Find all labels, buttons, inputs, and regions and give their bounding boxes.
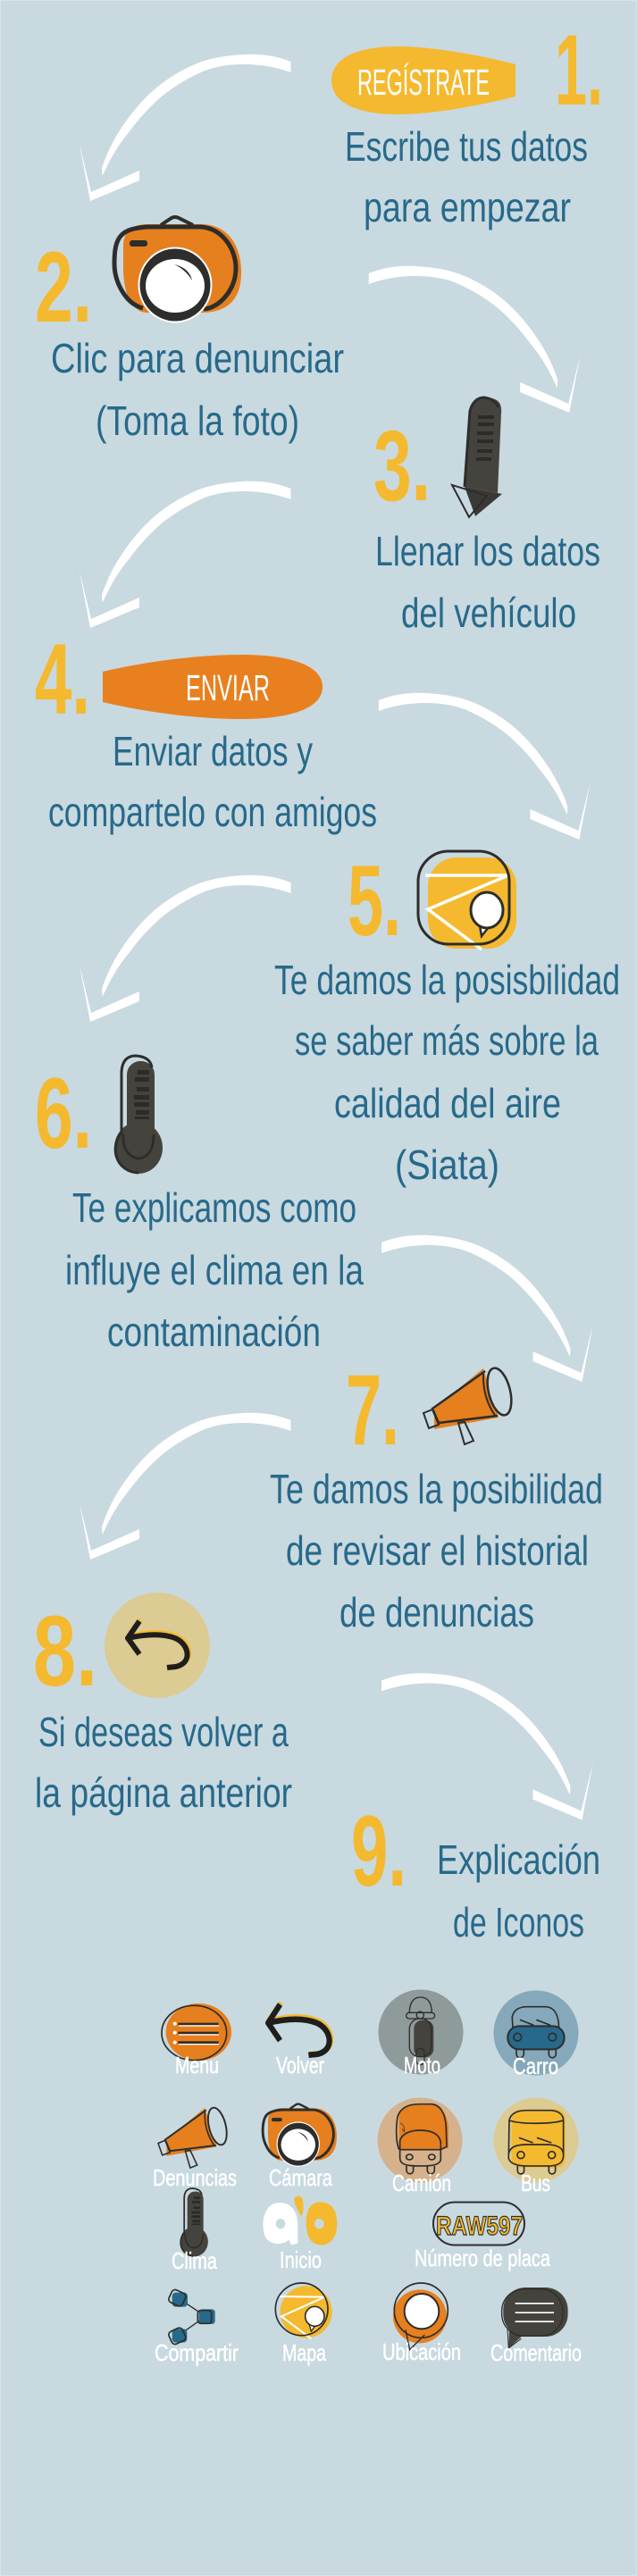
button: registrate: REGÍSTRATE bbox=[357, 62, 490, 103]
label: ubicacion: Ubicación bbox=[382, 2338, 461, 2365]
arrow: step 5 to step 6 bbox=[80, 875, 290, 1022]
text: step 8 description: Si deseas volver a bbox=[38, 1709, 289, 1755]
text: step 3 description: del vehículo bbox=[401, 590, 576, 636]
arrow: step 1 to step 2 bbox=[80, 54, 290, 201]
text: step 1 description bbox=[345, 123, 588, 230]
label: menu: Menu bbox=[175, 2052, 219, 2078]
panel: step 7 bbox=[270, 1354, 603, 1635]
text: step 3 description bbox=[375, 528, 600, 636]
button: enviar bbox=[103, 655, 323, 719]
arrow: step 2 to step 3 bbox=[369, 266, 581, 413]
label: mapa: Mapa bbox=[282, 2339, 326, 2366]
panel: step 4 bbox=[35, 623, 377, 835]
panel: step 1 bbox=[331, 14, 603, 230]
text: step 4 description: Enviar datos y bbox=[113, 728, 313, 774]
label: carro: Carro bbox=[513, 2053, 558, 2079]
arrow: step 8 to step 9 bbox=[381, 1673, 593, 1820]
panel: step 8 bbox=[33, 1593, 292, 1816]
icon: license plate: RAW597 bbox=[436, 2212, 523, 2241]
number 2: 2. bbox=[35, 231, 92, 343]
icon: map bbox=[418, 851, 516, 949]
icon: thermometer small bbox=[180, 2188, 208, 2257]
label: denuncias: Denuncias bbox=[153, 2164, 237, 2191]
text: step 7 description: de denuncias bbox=[339, 1589, 534, 1635]
text: step 6 description: contaminación bbox=[107, 1309, 321, 1355]
panel: icon legend bbox=[153, 1990, 582, 2366]
icon: back circle bbox=[105, 1593, 210, 1698]
icon: location bbox=[393, 2283, 448, 2350]
text: step 2 description bbox=[51, 335, 344, 444]
number 9: 9. bbox=[351, 1795, 407, 1907]
icon: license plate bbox=[433, 2203, 524, 2246]
button: registrate bbox=[331, 46, 515, 114]
panel: step 6 bbox=[35, 1056, 364, 1355]
text: step 4 description bbox=[48, 728, 377, 835]
icon: map small bbox=[275, 2283, 332, 2338]
panel: step 5 bbox=[274, 845, 620, 1188]
text: step 2 description: (Toma la foto) bbox=[96, 397, 299, 444]
text: step 6 description: influye el clima en la bbox=[65, 1247, 364, 1293]
text: step 5 description bbox=[274, 957, 620, 1188]
text: step 8 description bbox=[35, 1709, 292, 1816]
label: clima: Clima bbox=[172, 2247, 217, 2274]
panel: step 9 bbox=[351, 1795, 600, 1945]
label: bus: Bus bbox=[521, 2170, 550, 2196]
text: step 5 description: calidad del aire bbox=[334, 1080, 561, 1126]
label: camara: Cámara bbox=[269, 2164, 332, 2191]
arrow: step 7 to step 8 bbox=[80, 1413, 290, 1560]
icon: camera small bbox=[263, 2104, 337, 2167]
text: step 7 description bbox=[270, 1466, 603, 1635]
label: numero de placa: Número de placa bbox=[415, 2245, 550, 2271]
panel: step 2 bbox=[35, 217, 344, 444]
arrow: step 4 to step 5 bbox=[379, 693, 591, 840]
icon: thermometer bbox=[114, 1056, 163, 1174]
icon: pencil bbox=[452, 397, 502, 517]
icon: megaphone bbox=[423, 1366, 515, 1444]
label: camion: Camión bbox=[392, 2170, 451, 2196]
icon: inicio logo bbox=[263, 2196, 337, 2245]
icon: moto bbox=[379, 1990, 463, 2074]
label: volver: Volver bbox=[276, 2052, 324, 2078]
text: step 5 description: (Siata) bbox=[395, 1142, 499, 1188]
button: enviar: ENVIAR bbox=[186, 667, 270, 708]
text: step 4 description: compartelo con amigos bbox=[48, 789, 377, 835]
number 7: 7. bbox=[346, 1354, 399, 1466]
text: step 1 description: para empezar bbox=[364, 184, 571, 230]
icon: back arrow bbox=[268, 2003, 331, 2055]
panel: step 3 bbox=[373, 397, 600, 636]
icon: camera bbox=[114, 217, 241, 323]
number 4: 4. bbox=[35, 623, 90, 735]
number 3: 3. bbox=[373, 410, 431, 522]
text: step 8 description: la página anterior bbox=[35, 1769, 292, 1816]
icon: megaphone small bbox=[158, 2106, 230, 2168]
number 8: 8. bbox=[33, 1595, 97, 1707]
icon: carro bbox=[493, 1990, 579, 2076]
text: step 6 description: Te explicamos como bbox=[72, 1184, 356, 1231]
number 5: 5. bbox=[348, 845, 401, 957]
label: inicio: Inicio bbox=[280, 2246, 322, 2273]
label: compartir: Compartir bbox=[155, 2339, 239, 2366]
icon: comment bbox=[502, 2287, 568, 2348]
text: step 2 description: Clic para denunciar bbox=[51, 335, 344, 381]
icon: share bbox=[168, 2288, 215, 2346]
label: comentario: Comentario bbox=[490, 2339, 582, 2366]
icon: menu bbox=[162, 2003, 231, 2061]
icon: camion bbox=[377, 2097, 463, 2183]
text: step 9 description: de Iconos bbox=[453, 1899, 584, 1945]
text: step 9 description bbox=[437, 1836, 600, 1945]
label: moto: Moto bbox=[404, 2052, 440, 2078]
number 1: 1. bbox=[555, 14, 603, 126]
text: step 6 description bbox=[65, 1184, 364, 1355]
number 6: 6. bbox=[35, 1058, 92, 1169]
arrow: step 6 to step 7 bbox=[381, 1235, 593, 1382]
icon: bus bbox=[493, 2097, 579, 2183]
arrow: step 3 to step 4 bbox=[80, 481, 290, 628]
